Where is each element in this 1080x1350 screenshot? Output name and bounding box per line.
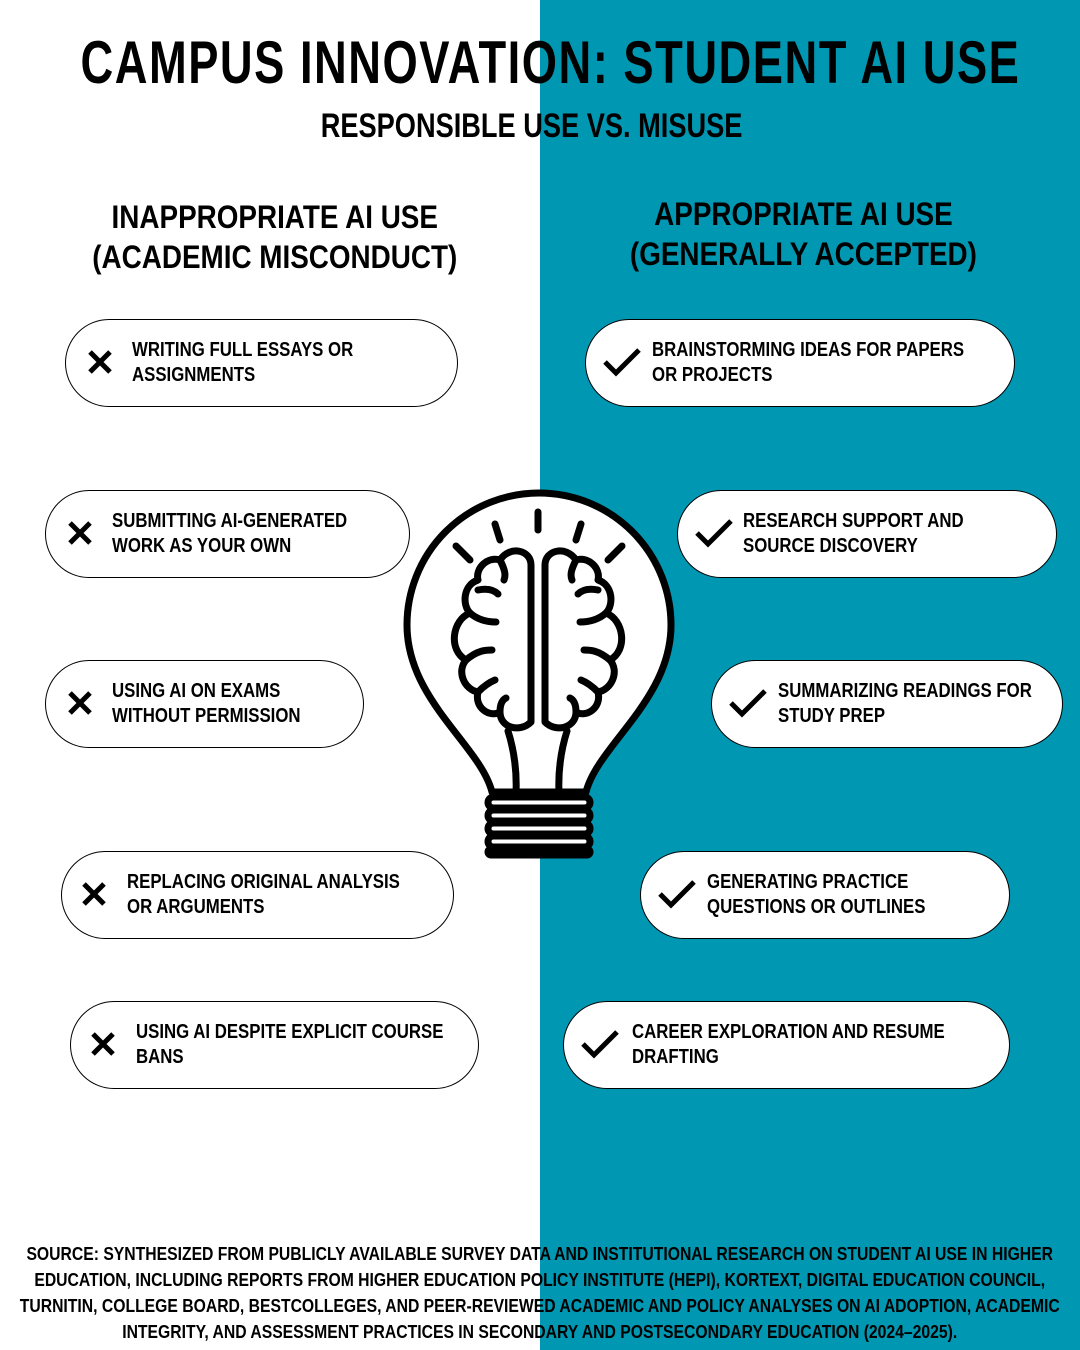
source text: SOURCE: SYNTHESIZED FROM PUBLICLY AVAILABLE SURVEY DATA AND INSTITUTIONAL RESEARCH ON STUDENT AI USE IN HIGHER: [27, 1243, 1053, 1264]
source text: TURNITIN, COLLEGE BOARD, BESTCOLLEGES, AND PEER-REVIEWED ACADEMIC AND POLICY ANALYSES ON AI ADOPTION, ACADEMIC: [20, 1295, 1060, 1316]
pill: practice questions: GENERATING PRACTICE: [707, 871, 908, 893]
pill: replacing analysis: REPLACING ORIGINAL ANALYSIS: [127, 871, 400, 893]
pill: career exploration: CAREER EXPLORATION AND RESUME: [632, 1021, 945, 1043]
pill: research support: SOURCE DISCOVERY: [743, 535, 918, 557]
pill: exams: [45, 660, 364, 748]
pill: submitting ai-generated work: [45, 490, 410, 578]
pill: replacing analysis: [61, 851, 454, 939]
pill: writing full essays: WRITING FULL ESSAYS OR: [132, 339, 353, 361]
source text: [20, 1243, 1060, 1342]
pill: practice questions: [640, 851, 1010, 939]
pill: summarizing: STUDY PREP: [778, 705, 885, 727]
pill: brainstorming: [585, 319, 1015, 407]
source text: EDUCATION, INCLUDING REPORTS FROM HIGHER EDUCATION POLICY INSTITUTE (HEPI), KORTEXT, DIGITAL EDUCATION COUNCIL,: [35, 1269, 1045, 1290]
heading: appropriate: (GENERALLY ACCEPTED): [629, 236, 976, 272]
heading: inappropriate: (ACADEMIC MISCONDUCT): [93, 239, 457, 275]
pill: exams: WITHOUT PERMISSION: [112, 705, 301, 727]
pill: course bans: [70, 1001, 479, 1089]
source text: INTEGRITY, AND ASSESSMENT PRACTICES IN SECONDARY AND POSTSECONDARY EDUCATION (2024–2025).: [122, 1321, 958, 1342]
pill: exams: USING AI ON EXAMS: [112, 680, 280, 702]
pill: submitting ai-generated work: SUBMITTING AI-GENERATED: [112, 510, 347, 532]
pill: writing full essays: ASSIGNMENTS: [132, 364, 255, 386]
title: CAMPUS INNOVATION: STUDENT AI USE: [80, 29, 1020, 96]
heading: appropriate: APPROPRIATE AI USE: [654, 196, 952, 232]
pill: course bans: USING AI DESPITE EXPLICIT COURSE: [136, 1021, 443, 1043]
pill: course bans: BANS: [136, 1046, 184, 1068]
pill: career exploration: DRAFTING: [632, 1046, 719, 1068]
heading: appropriate: [629, 196, 976, 272]
pill: brainstorming: OR PROJECTS: [652, 364, 772, 386]
heading: inappropriate: INAPPROPRIATE AI USE: [112, 199, 438, 235]
pill: replacing analysis: OR ARGUMENTS: [127, 896, 265, 918]
pill: summarizing: [711, 660, 1063, 748]
subtitle: RESPONSIBLE USE VS. MISUSE: [321, 107, 743, 145]
pill: career exploration: [563, 1001, 1010, 1089]
pill: submitting ai-generated work: WORK AS YOUR OWN: [112, 535, 291, 557]
pill: writing full essays: [65, 319, 458, 407]
pill: practice questions: QUESTIONS OR OUTLINES: [707, 896, 925, 918]
pill: brainstorming: BRAINSTORMING IDEAS FOR PAPERS: [652, 339, 964, 361]
pill: research support: RESEARCH SUPPORT AND: [743, 510, 964, 532]
pill: summarizing: SUMMARIZING READINGS FOR: [778, 680, 1032, 702]
pill: research support: [677, 490, 1057, 578]
heading: inappropriate: [93, 199, 457, 275]
